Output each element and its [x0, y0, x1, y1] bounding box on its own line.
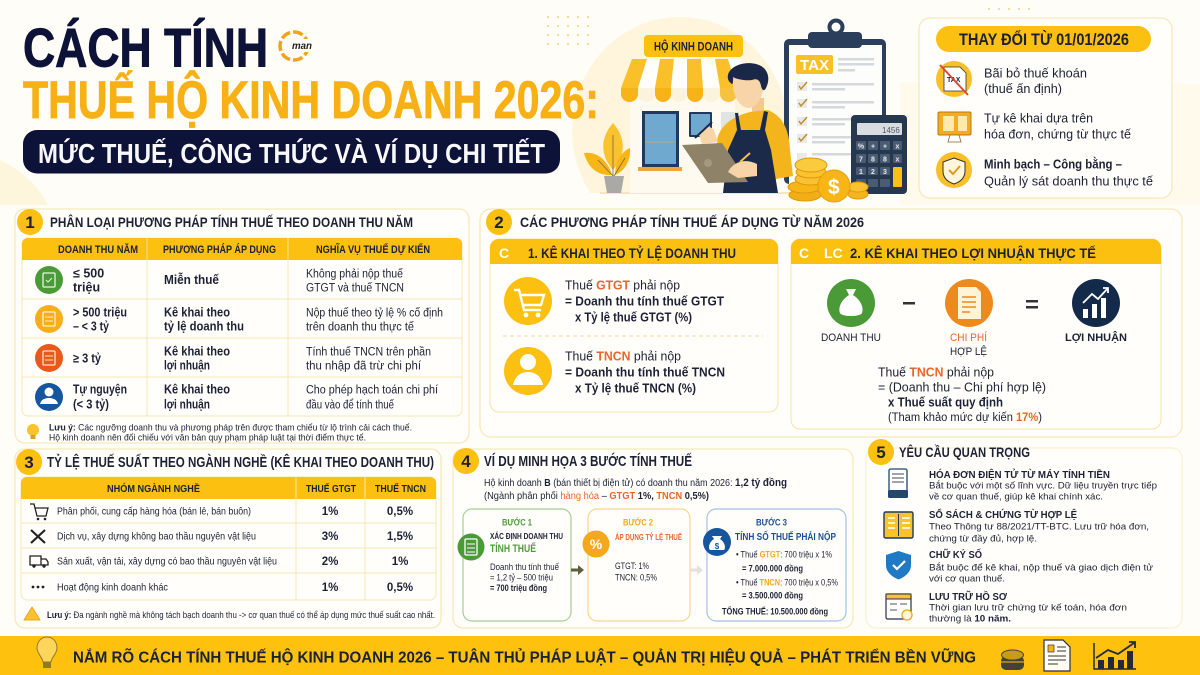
- equation: profit: [1065, 279, 1127, 344]
- item: e-invoice: Bắt buộc với một số lĩnh vực. Dữ liệu truyền trực tiếp: [929, 480, 1157, 492]
- step 3: $: [715, 542, 720, 551]
- item: digital signature: CHỮ KÝ SỐ: [929, 547, 982, 561]
- icon: calculator: 1: [859, 169, 863, 176]
- bottom banner: [0, 636, 1200, 675]
- logo: man: [292, 41, 312, 52]
- row: other: [32, 582, 413, 594]
- subtitle pill: MỨC THUẾ, CÔNG THỨC VÀ VÍ DỤ CHI TIẾT: [38, 137, 545, 169]
- icon: calculator: 2: [871, 169, 875, 176]
- card: actual-profit method: 2. KÊ KHAI THEO LỢI NHUẬN THỰC TẾ: [850, 244, 1096, 261]
- section number: 2: [494, 213, 504, 232]
- title line 2: THUẾ HỘ KINH DOANH 2026:: [23, 69, 599, 130]
- icon: plant: [584, 123, 630, 193]
- section number: 4: [461, 452, 471, 471]
- heading: PHÂN LOẠI PHƯƠNG PHÁP TÍNH THUẾ THEO DOANH THU NĂM: [50, 213, 413, 230]
- row: services: 3%: [322, 531, 338, 543]
- text: item 2: Tự kê khai dựa trên: [984, 110, 1093, 126]
- section number: [17, 209, 43, 235]
- row: services: [31, 530, 413, 543]
- row: manufacturing: 2%: [322, 556, 338, 568]
- row: from 3 billion: thu nhập đã trừ chi phí: [306, 360, 422, 372]
- card: revenue-rate method: 1. KÊ KHAI THEO TỶ LỆ DOANH THU: [528, 246, 736, 261]
- section number: [16, 449, 42, 475]
- step 3: TÍNH SỐ THUẾ PHẢI NỘP: [735, 529, 836, 543]
- card: actual-profit method: C: [799, 245, 809, 261]
- item: e-invoice: HÓA ĐƠN ĐIỆN TỬ TỪ MÁY TÍNH TIỀN: [929, 468, 1110, 481]
- row: distribution: 0,5%: [387, 506, 413, 518]
- item: books and vouchers: [884, 508, 1149, 544]
- step 2: GTGT: 1%: [615, 561, 649, 571]
- row: voluntary: Kê khai theo: [164, 382, 230, 396]
- formula: personal income tax: = Doanh thu tính thuế TNCN: [565, 364, 725, 380]
- step 3: • Thuế TNCN: 700 triệu x 0,5%: [736, 578, 838, 588]
- item: digital signature: Bắt buộc để kê khai, nộp thuế và giao dịch điện tử: [929, 562, 1154, 574]
- row: from 3 billion: Kê khai theo: [164, 344, 230, 358]
- item: record archive: Thời gian lưu trữ chứng từ kế toán, hóa đơn: [929, 602, 1127, 614]
- icon: calculator: 1456: [882, 126, 900, 135]
- step 1: XÁC ĐỊNH DOANH THU: [490, 532, 563, 541]
- icon: document: [1044, 640, 1070, 671]
- title: [23, 16, 599, 174]
- icon: calculator: x: [896, 156, 900, 164]
- item: digital signature: [886, 547, 1154, 584]
- formula: personal income tax: [565, 348, 725, 396]
- step 2: TNCN: 0,5%: [615, 572, 657, 582]
- note with bulb icon: [27, 422, 412, 444]
- icon: growth chart: [1094, 642, 1136, 669]
- item: e-invoice: về cơ quan thuế, giúp kê khai chính xác.: [929, 492, 1103, 502]
- icon: sign: [644, 35, 743, 57]
- equation: revenue: DOANH THU: [821, 332, 881, 344]
- row: 500 million to 3 billion: Nộp thuế theo tỷ lệ % cố định: [306, 308, 443, 320]
- row: distribution: Phân phối, cung cấp hàng hóa (bán lẻ, bán buôn): [57, 506, 251, 518]
- arrow: step 1 to 2: [571, 565, 584, 575]
- heading: YÊU CẦU QUAN TRỌNG: [899, 443, 1030, 460]
- step 2: %: [590, 536, 603, 552]
- equation: revenue: [821, 279, 881, 344]
- icon: calculator: 8: [871, 156, 875, 164]
- formula: VAT: x Tỷ lệ thuế GTGT (%): [575, 310, 692, 324]
- item: books and vouchers: SỔ SÁCH & CHỨNG TỪ HỢP LỆ: [929, 508, 1077, 521]
- formula: profit tax: (Tham khảo mức dự kiến 17%): [888, 412, 1042, 424]
- row: voluntary: [35, 382, 439, 412]
- step 3: = 7.000.000 đồng: [742, 564, 803, 574]
- icon: person: [504, 347, 552, 395]
- table header: [58, 243, 430, 256]
- icon: monitor: [938, 112, 971, 142]
- step 2: BƯỚC 2: [623, 516, 653, 528]
- step 1: BƯỚC 1: [502, 516, 533, 528]
- formula: profit tax: [878, 364, 1046, 424]
- panel 1: method classification: [15, 209, 469, 444]
- text: item 2: hóa đơn, chứng từ thực tế: [984, 126, 1132, 142]
- title line 1: CÁCH TÍNH: [23, 16, 268, 78]
- heading: CÁC PHƯƠNG PHÁP TÍNH THUẾ ÁP DỤNG TỪ NĂM 2026: [520, 215, 864, 230]
- step 3: = 3.500.000 đồng: [742, 590, 803, 600]
- panel 4: 3-step example: [453, 448, 853, 628]
- step 1: Doanh thu tính thuế: [490, 562, 559, 572]
- row: up to 500 million: triệu: [73, 280, 100, 294]
- formula: VAT: Thuế GTGT phải nộp: [565, 278, 680, 292]
- text: item 3: [984, 156, 1154, 188]
- panel 3: tax rates by industry: [15, 449, 441, 628]
- note with warning icon: Lưu ý: Đa ngành nghề mà không tách bạch doanh thu -> cơ quan thuế có thể áp dụng mức thuế suất cao nhất.: [47, 610, 435, 621]
- icon: calculator: x: [896, 144, 900, 150]
- item: digital signature: với cơ quan thuế.: [929, 574, 1005, 584]
- step 3: TỔNG THUẾ: 10.500.000 đồng: [722, 606, 828, 616]
- row: up to 500 million: [35, 266, 404, 294]
- icon: calculator: %: [858, 144, 865, 150]
- item: e-invoice: [888, 468, 1157, 502]
- icon: coins: [1001, 650, 1024, 670]
- icon: shop owner: [682, 63, 793, 193]
- icon: calculator: 3: [883, 169, 887, 176]
- icon: sign: HỘ KINH DOANH: [654, 40, 733, 54]
- intro text: Hộ kinh doanh B (bán thiết bị điện tử) có doanh thu năm 2026: 1,2 tỷ đồng: [484, 477, 787, 489]
- icon: coins: [788, 158, 868, 202]
- operator: equals: [1026, 300, 1038, 308]
- row: services: 1,5%: [387, 531, 413, 543]
- step 1: = 1,2 tỷ – 500 triệu: [490, 572, 553, 582]
- icon: abolished tax paper: TAX: [947, 77, 961, 84]
- table header: DOANH THU NĂM: [58, 243, 138, 256]
- formula: VAT: = Doanh thu tính thuế GTGT: [565, 294, 724, 308]
- row: 500 million to 3 billion: Kê khai theo: [164, 306, 230, 320]
- logo: [280, 32, 315, 60]
- equation: expenses: HỢP LỆ: [950, 345, 987, 358]
- table: [21, 477, 436, 600]
- table header: NGHĨA VỤ THUẾ DỰ KIẾN: [316, 243, 430, 256]
- step 1: [458, 509, 571, 621]
- heading pill: THAY ĐỔI TỪ 01/01/2026: [959, 30, 1129, 49]
- section number: [486, 209, 512, 235]
- formula: profit tax: = (Doanh thu – Chi phí hợp lệ): [878, 380, 1046, 394]
- section number: 3: [24, 453, 34, 472]
- item: record archive: [886, 590, 1127, 624]
- row: manufacturing: [30, 556, 408, 568]
- row: voluntary: Cho phép hạch toán chi phí: [306, 384, 439, 396]
- table header: THUẾ GTGT: [306, 482, 356, 495]
- row: from 3 billion: ≥ 3 tỷ: [73, 352, 101, 366]
- icon: calculator: 7: [859, 156, 863, 164]
- text: item 2: [984, 110, 1132, 142]
- row: voluntary: đầu vào để tính thuế: [306, 400, 394, 412]
- table header: PHƯƠNG PHÁP ÁP DỤNG: [163, 243, 276, 256]
- icon: clipboard: [784, 20, 886, 184]
- card: revenue-rate method: C: [499, 245, 509, 261]
- row: distribution: [30, 504, 413, 520]
- row: up to 500 million: Miễn thuế: [164, 272, 219, 287]
- panel: changes from 01/01/2026: [919, 18, 1172, 198]
- row: 500 million to 3 billion: [35, 305, 443, 334]
- subtitle pill: [23, 130, 560, 174]
- table header: THUẾ TNCN: [375, 482, 426, 495]
- heading: TỶ LỆ THUẾ SUẤT THEO NGÀNH NGHỀ (KÊ KHAI THEO DOANH THU): [47, 453, 434, 471]
- banner text: NẮM RÕ CÁCH TÍNH THUẾ HỘ KINH DOANH 2026 – TUÂN THỦ PHÁP LUẬT – QUẢN TRỊ HIỆU QUẢ – PHÁT TRIỂN BỀN VỮNG: [73, 646, 976, 666]
- step 3: BƯỚC 3: [756, 516, 787, 528]
- row: voluntary: Tự nguyện: [73, 382, 127, 396]
- formula: personal income tax: Thuế TNCN phải nộp: [565, 348, 681, 364]
- row: other: 0,5%: [387, 582, 413, 594]
- formula: profit tax: Thuế TNCN phải nộp: [878, 364, 994, 380]
- row: distribution: 1%: [322, 506, 338, 518]
- item: record archive: thường là 10 năm.: [929, 614, 1011, 624]
- formula: VAT: [565, 278, 724, 324]
- note with bulb icon: Hộ kinh doanh nên đối chiếu với văn bản quy phạm pháp luật tại thời điểm thực tế.: [49, 432, 366, 444]
- icon: calculator: 8: [883, 156, 887, 164]
- row: voluntary: lợi nhuận: [164, 398, 210, 412]
- intro text: [484, 477, 787, 502]
- row: 500 million to 3 billion: – < 3 tỷ: [73, 320, 109, 334]
- row: 500 million to 3 billion: > 500 triệu: [73, 306, 127, 320]
- equation: expenses: CHI PHÍ: [950, 331, 988, 344]
- icon: shield: [936, 152, 972, 188]
- arrow: step 2 to 3: [690, 565, 703, 575]
- table header: [107, 482, 426, 495]
- note with bulb icon: Lưu ý: Các ngưỡng doanh thu và phương pháp trên được tham chiếu từ lộ trình cải cách thuế.: [49, 422, 412, 434]
- row: 500 million to 3 billion: trên doanh thu thực tế: [306, 322, 415, 334]
- row: from 3 billion: Tính thuế TNCN trên phần: [306, 346, 431, 358]
- row: services: Dịch vụ, xây dựng không bao thầu nguyên vật liệu: [57, 530, 256, 542]
- row: other: Hoạt động kinh doanh khác: [57, 582, 168, 594]
- row: other: 1%: [322, 582, 338, 594]
- formula: personal income tax: x Tỷ lệ thuế TNCN (%): [575, 380, 696, 396]
- step 3: • Thuế GTGT: 700 triệu x 1%: [736, 550, 832, 560]
- icon: calculator: +: [883, 144, 887, 150]
- icon: calculator: +: [871, 144, 875, 150]
- card: revenue-rate method: [490, 239, 778, 412]
- equation: expenses: [945, 279, 993, 358]
- section number: [868, 439, 894, 465]
- icon: coins: $: [828, 176, 840, 199]
- section number: 5: [876, 443, 886, 462]
- panel 5: important requirements: [866, 439, 1182, 628]
- row: from 3 billion: lợi nhuận: [164, 358, 210, 372]
- icon: bulb: [37, 637, 57, 668]
- text: item 3: Minh bạch – Công bằng –: [984, 156, 1122, 172]
- text: item 1: [984, 66, 1087, 96]
- table header: NHÓM NGÀNH NGHỀ: [107, 482, 200, 495]
- icon: cart: [504, 277, 552, 325]
- icon: calculator: [851, 115, 907, 194]
- note with warning icon: [24, 607, 435, 621]
- text: item 1: (thuế ấn định): [984, 81, 1062, 96]
- icon: clipboard: TAX: [800, 58, 829, 74]
- step 2: ÁP DỤNG TỶ LỆ THUẾ: [615, 532, 683, 542]
- row: manufacturing: Sản xuất, vận tải, xây dựng có bao thầu nguyên vật liệu: [57, 556, 277, 568]
- panel 2: methods applied from 2026: [480, 209, 1182, 437]
- step 3: [703, 509, 846, 621]
- item: books and vouchers: Theo Thông tư 88/2021/TT-BTC. Lưu trữ hóa đơn,: [929, 522, 1149, 532]
- icon: shop: [621, 59, 745, 193]
- equation: profit: LỢI NHUẬN: [1065, 331, 1127, 344]
- row: up to 500 million: GTGT và thuế TNCN: [306, 282, 404, 294]
- heading: VÍ DỤ MINH HỌA 3 BƯỚC TÍNH THUẾ: [484, 452, 692, 470]
- heading pill: [936, 26, 1151, 52]
- text: item 1: Bãi bỏ thuế khoán: [984, 66, 1087, 80]
- text: item 3: Quản lý sát doanh thu thực tế: [984, 174, 1154, 188]
- icon: abolished tax paper: [936, 61, 972, 97]
- step 2: [582, 509, 690, 621]
- row: from 3 billion: [35, 344, 431, 372]
- item: record archive: LƯU TRỮ HỒ SƠ: [929, 590, 1007, 603]
- intro text: (Ngành phân phối hàng hóa – GTGT 1%, TNCN 0,5%): [484, 490, 709, 502]
- step 1: = 700 triệu đồng: [490, 583, 547, 593]
- formula: profit tax: x Thuế suất quy định: [888, 394, 1003, 410]
- row: manufacturing: 1%: [392, 556, 408, 568]
- card: actual-profit method: [791, 239, 1161, 429]
- step 1: TÍNH THUẾ: [490, 542, 536, 555]
- row: up to 500 million: ≤ 500: [73, 266, 104, 280]
- row: voluntary: (< 3 tỷ): [73, 398, 109, 412]
- illustration: shop owner with tax checklist: [584, 20, 907, 202]
- card: actual-profit method: LC: [824, 245, 843, 261]
- item: books and vouchers: chứng từ đầy đủ, hợp lệ.: [929, 534, 1037, 544]
- section number: [453, 448, 479, 474]
- section number: 1: [25, 213, 35, 232]
- operator: minus: [903, 302, 915, 304]
- table: [22, 238, 462, 416]
- row: 500 million to 3 billion: tỷ lệ doanh thu: [164, 320, 244, 334]
- row: up to 500 million: Không phải nộp thuế: [306, 268, 404, 280]
